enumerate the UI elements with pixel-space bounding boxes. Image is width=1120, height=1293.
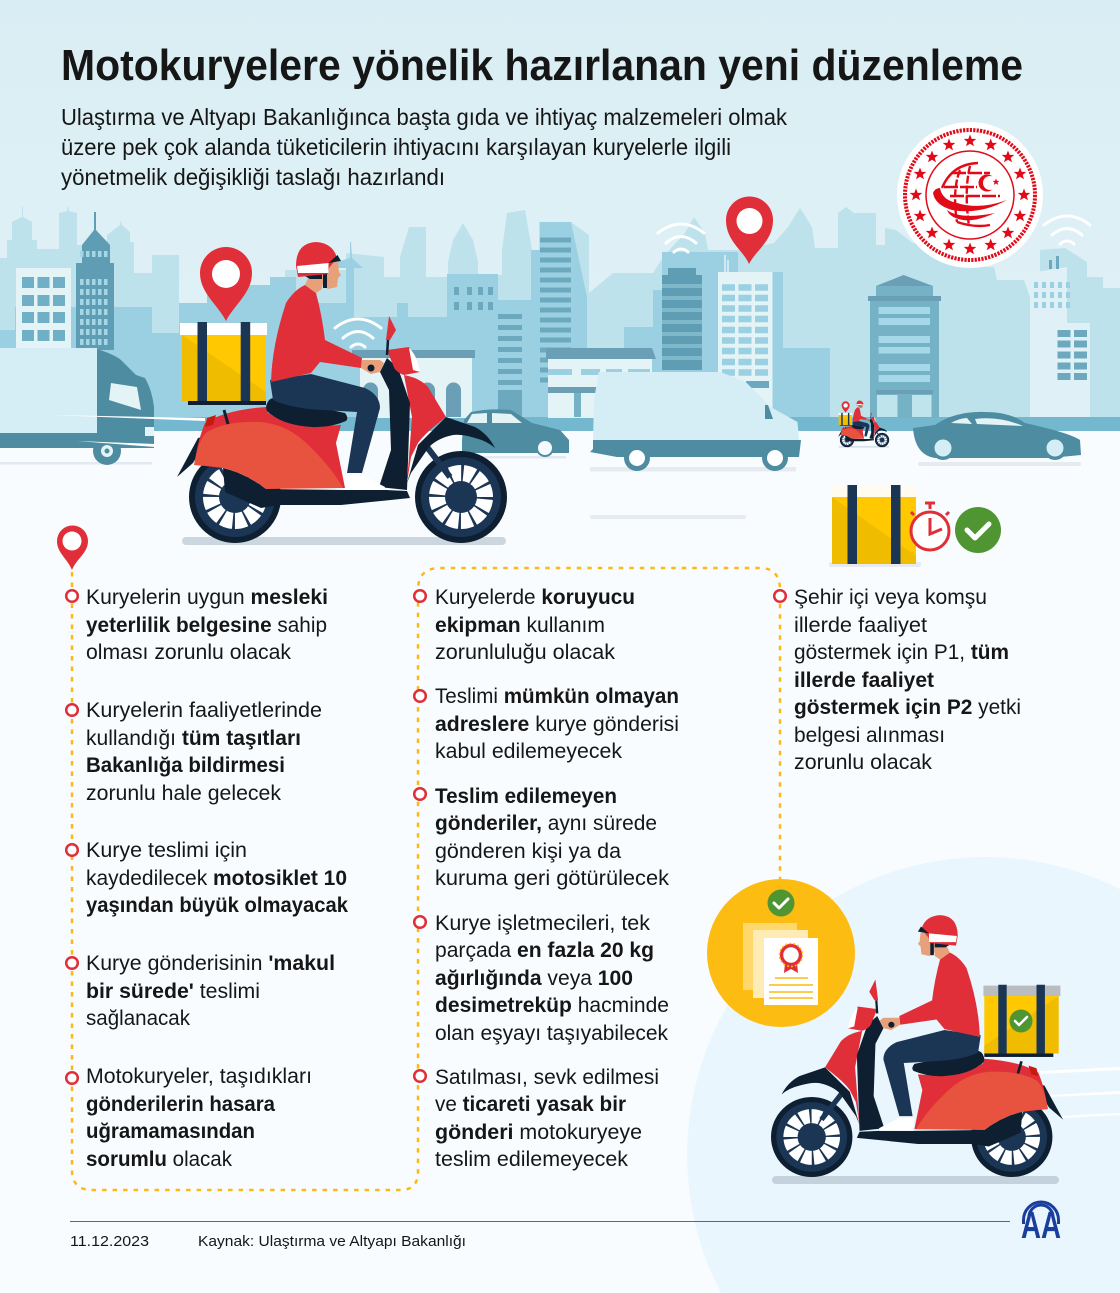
footer rule xyxy=(70,1221,1010,1222)
text column 3 xyxy=(794,586,1021,774)
text column 2: ve ticareti yasak bir xyxy=(435,1093,626,1116)
intro text: Ulaştırma ve Altyapı Bakanlığınca başta gıda ve ihtiyaç malzemeleri olmak xyxy=(61,104,787,130)
text column 1 xyxy=(86,586,348,1171)
text column 2: Kuryelerde koruyucu xyxy=(435,586,635,609)
text column 2: zorunluluğu olacak xyxy=(435,641,616,664)
van xyxy=(590,372,801,472)
text column 1: yeterlilik belgesine sahip xyxy=(86,614,327,637)
ministry emblem xyxy=(897,122,1043,268)
text column 1: Bakanlığa bildirmesi xyxy=(86,754,285,777)
text column 2: ekipman kullanım xyxy=(435,614,605,637)
text column 2: gönderiler, aynı sürede xyxy=(435,812,657,835)
text column 1: Motokuryeler, taşıdıkları xyxy=(86,1065,312,1088)
text column 2: gönderen kişi ya da xyxy=(435,840,621,863)
source: Kaynak: Ulaştırma ve Altyapı Bakanlığı xyxy=(198,1234,466,1250)
text column 3: illerde faaliyet xyxy=(794,614,927,637)
text column 1: kullandığı tüm taşıtları xyxy=(86,727,301,750)
text column 3: zorunlu olacak xyxy=(794,751,933,774)
text column 2: adreslere kurye gönderisi xyxy=(435,713,679,736)
text column 2: Satılması, sevk edilmesi xyxy=(435,1066,659,1089)
text column 1: Kurye gönderisinin 'makul xyxy=(86,952,335,975)
text column 2: kabul edilemeyecek xyxy=(435,740,623,763)
text column 3: göstermek için P2 yetki xyxy=(794,696,1021,719)
bullets xyxy=(66,590,786,1084)
text column 3: göstermek için P1, tüm xyxy=(794,641,1009,664)
intro text: yönetmelik değişikliği taslağı hazırlandı xyxy=(61,164,445,190)
text column 3: Şehir içi veya komşu xyxy=(794,586,987,609)
text column 2: teslim edilemeyecek xyxy=(435,1148,629,1171)
text column 1: sorumlu olacak xyxy=(86,1148,232,1171)
text column 2: desimetreküp hacminde xyxy=(435,994,669,1017)
text column 1: Kuryelerin faaliyetlerinde xyxy=(86,699,322,722)
AA logo: AA xyxy=(1021,1205,1061,1247)
text column 1: yaşından büyük olmayacak xyxy=(86,894,348,917)
icon: certificate badge xyxy=(707,879,855,1027)
text column 2: parçada en fazla 20 kg xyxy=(435,939,654,962)
text column 1: Kuryelerin uygun mesleki xyxy=(86,586,328,609)
text column 3: illerde faaliyet xyxy=(794,669,934,692)
dotted timeline xyxy=(72,568,780,1190)
text column 1: bir sürede' teslimi xyxy=(86,980,260,1003)
text column 2: Kurye işletmecileri, tek xyxy=(435,912,651,935)
text column 1: gönderilerin hasara xyxy=(86,1093,275,1116)
text column 3: belgesi alınması xyxy=(794,724,945,747)
text column 2: ağırlığında veya 100 xyxy=(435,967,633,990)
location pin marker xyxy=(57,526,88,570)
small scooter in the distance xyxy=(838,401,889,447)
title: Motokuryelere yönelik hazırlanan yeni düzenleme xyxy=(61,41,1023,90)
truck xyxy=(0,348,205,465)
text column 1: kaydedilecek motosiklet 10 xyxy=(86,867,347,890)
icon: parcel, stopwatch and check xyxy=(829,485,1001,567)
car behind scooter xyxy=(462,409,569,458)
delivery scooter rider bottom right xyxy=(771,915,1120,1184)
road marking xyxy=(590,515,746,519)
text column 1: sağlanacak xyxy=(86,1007,190,1030)
intro text xyxy=(61,104,787,190)
intro text: üzere pek çok alanda tüketicilerin ihtiyacını karşılayan kuryelerle ilgili xyxy=(61,134,731,160)
text column 2: Teslim edilemeyen xyxy=(435,785,617,808)
text column 1: olması zorunlu olacak xyxy=(86,641,291,664)
delivery scooter with rider and location pin xyxy=(177,242,507,545)
text column 1: Kurye teslimi için xyxy=(86,839,247,862)
text column 1: zorunlu hale gelecek xyxy=(86,782,281,805)
AA logo xyxy=(1021,1202,1061,1247)
text column 2: Teslimi mümkün olmayan xyxy=(435,685,679,708)
text column 2 xyxy=(435,586,679,1171)
location marker on tower xyxy=(726,196,773,264)
date: 11.12.2023 xyxy=(70,1234,149,1250)
text column 2: kuruma geri götürülecek xyxy=(435,867,670,890)
text column 2: gönderi motokuryeye xyxy=(435,1121,642,1144)
city skyline xyxy=(0,205,1120,431)
text column 1: uğramamasından xyxy=(86,1120,255,1143)
text column 2: olan eşyayı taşıyabilecek xyxy=(435,1022,668,1045)
car on the right xyxy=(913,412,1081,466)
